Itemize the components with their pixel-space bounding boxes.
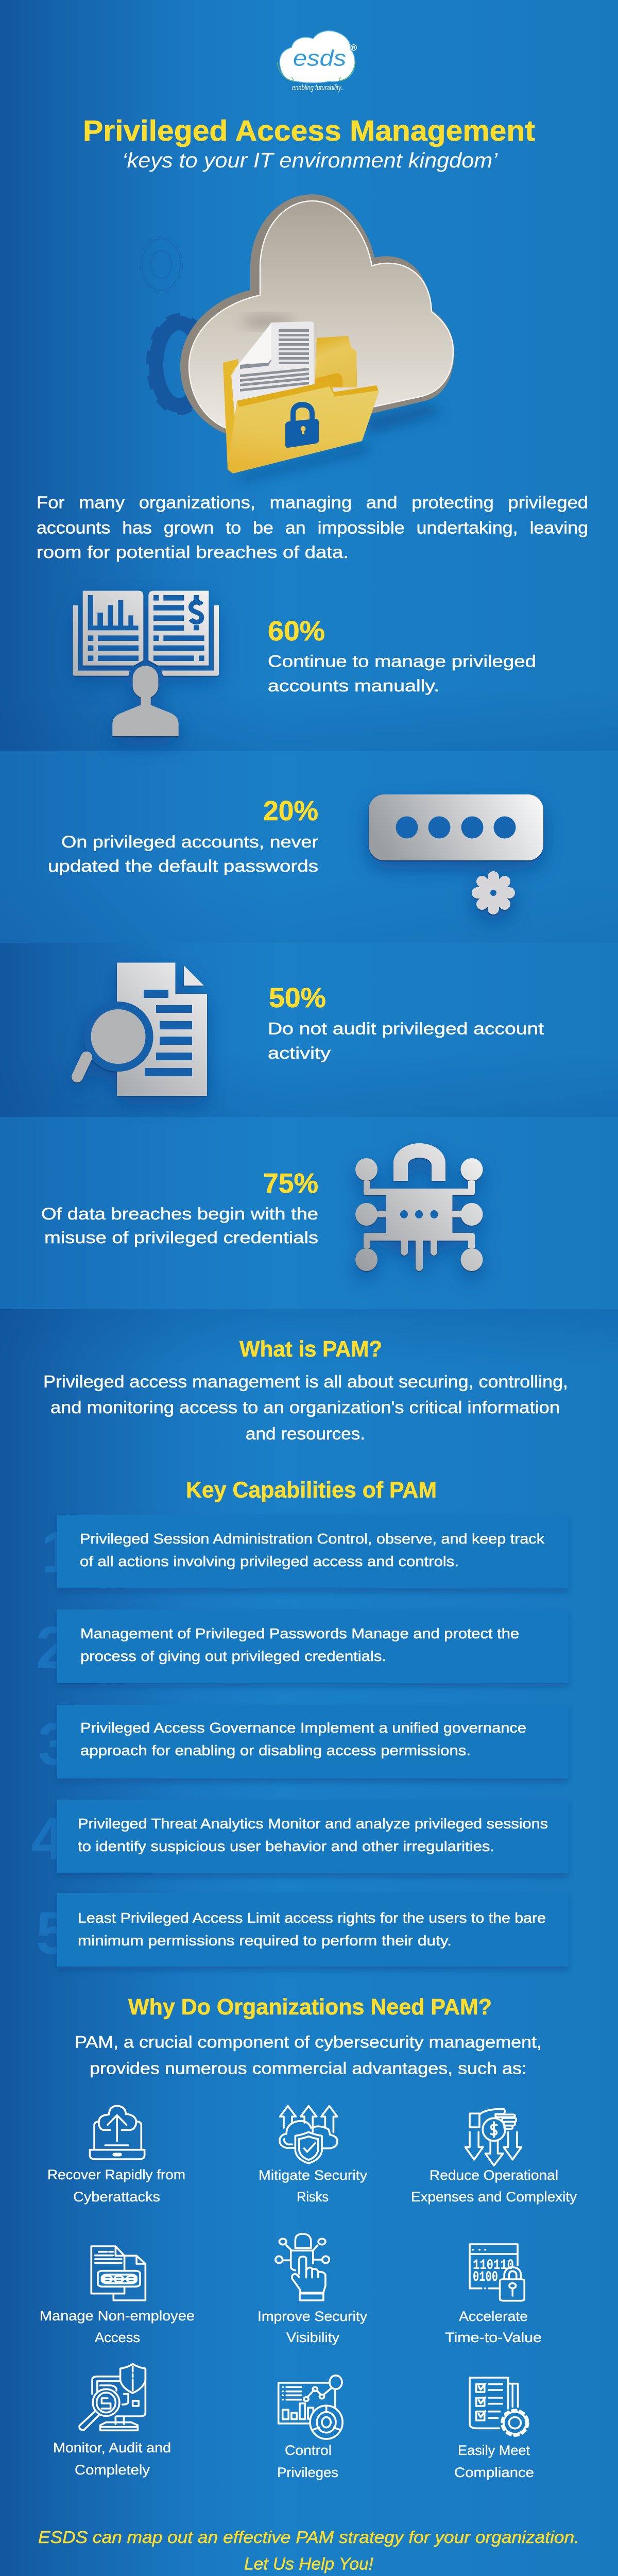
description line 2: updated the default passwords (48, 857, 318, 875)
intro paragraph (37, 493, 588, 562)
logo tagline: enabling futurability.. (292, 84, 344, 92)
line 3: room for potential breaches of data. (37, 543, 349, 562)
magnifier lens (91, 1009, 146, 1064)
description line 1: Of data breaches begin with the (41, 1205, 318, 1223)
line 2: accounts has grown to be an impossible undertaking, leaving (37, 518, 588, 537)
label: cyberattacks: Cyberattacks (73, 2189, 160, 2205)
folded corner (184, 965, 204, 986)
card 1 (57, 1515, 569, 1588)
description line 1: Do not audit privileged account (268, 1019, 544, 1038)
label: privileges: Privileges (277, 2465, 338, 2480)
value: 75% (263, 1168, 318, 1199)
number 2: 2 (36, 1614, 70, 1681)
logo: esds (277, 31, 356, 92)
paper fold (231, 323, 271, 374)
call to action line 2: Let Us Help You! (244, 2554, 373, 2573)
hero illustration: cloud with locked folder (140, 194, 454, 482)
stat: 20% (48, 795, 318, 875)
shackle (393, 1143, 445, 1181)
heading: What is PAM? (239, 1336, 382, 1362)
benefit labels row 2 (40, 2308, 542, 2345)
benefit labels row 3 (53, 2440, 534, 2480)
paragraph line 1: Privileged access management is all about securing, controlling, (43, 1372, 568, 1391)
label: visibility: Visibility (286, 2330, 340, 2345)
icon: fingerprint touch nodes (276, 2234, 329, 2300)
card 2 (57, 1609, 569, 1683)
solid gear (149, 316, 209, 412)
text bars (144, 990, 192, 1076)
icon: password field with gear (369, 794, 543, 909)
label: mitigate: Mitigate Security (259, 2167, 368, 2183)
icon: control dashboard (279, 2376, 342, 2439)
folder shadow (237, 443, 371, 482)
label: expenses: Expenses and Complexity (411, 2189, 577, 2205)
password box (369, 794, 543, 860)
gear flower (477, 877, 509, 909)
icon: laptop cloud upload (90, 2106, 145, 2159)
terminal pads (355, 1158, 483, 1271)
card 4 line 1: Privileged Threat Analytics Monitor and analyze privileged sessions (78, 1816, 548, 1832)
card 5 line 1: Least Privileged Access Limit access rights for the users to the bare (78, 1910, 546, 1926)
card 4 (57, 1800, 569, 1873)
label: accelerate: Accelerate (459, 2309, 528, 2324)
number 1: 1 (41, 1518, 75, 1585)
label: compliance: Compliance (454, 2465, 534, 2480)
capability 2 (36, 1609, 569, 1683)
circuit body (364, 1181, 475, 1271)
heading: Why Do Organizations Need PAM? (128, 1994, 492, 2020)
magnifier ring gap (83, 1002, 153, 1072)
card 3 (57, 1705, 569, 1778)
paper text lines (240, 329, 309, 392)
number 5: 5 (36, 1900, 70, 1967)
label: completely: Completely (75, 2462, 150, 2478)
card 1 line 1: Privileged Session Administration Control, observe, and keep track (80, 1531, 545, 1547)
description line 2: activity (268, 1044, 331, 1062)
front folder (228, 381, 379, 473)
line 1: For many organizations, managing and protecting privileged (37, 493, 588, 512)
description line 2: misuse of privileged credentials (44, 1228, 318, 1247)
label: reduce: Reduce Operational (430, 2167, 558, 2183)
description line 1: On privileged accounts, never (61, 833, 318, 851)
icon: binary window with lock (470, 2244, 524, 2301)
card 5 line 2: minimum permissions required to perform their duty. (78, 1933, 452, 1948)
intro line 2: provides numerous commercial advantages, such as: (90, 2059, 527, 2077)
card 3 line 1: Privileged Access Governance Implement a unified governance (80, 1720, 526, 1736)
value: 50% (269, 982, 326, 1013)
capability 1 (41, 1515, 569, 1588)
label: control: Control (285, 2443, 332, 2458)
icon: documents with chain (91, 2246, 145, 2300)
icon: circuit padlock (355, 1143, 483, 1271)
icon: shield cloud arrows (280, 2106, 337, 2163)
outline gear (140, 236, 182, 293)
password dots (396, 816, 516, 839)
subtitle: ‘keys to your IT environment kingdom’ (122, 148, 498, 172)
number 3: 3 (38, 1710, 72, 1777)
shadow on cloud (242, 317, 294, 327)
magnifier handle (77, 1057, 87, 1077)
cloud face (189, 201, 453, 430)
icon: monitor shield magnifier (79, 2364, 145, 2430)
stat: 50% (268, 982, 544, 1062)
back folder sheet (315, 336, 357, 387)
binary line 1: 110110 (473, 2258, 514, 2274)
label: access: Access (95, 2330, 140, 2345)
description line 2: accounts manually. (268, 676, 439, 695)
capability 4 (31, 1800, 569, 1873)
call to action line 1: ESDS can map out an effective PAM strategy for your organization. (38, 2528, 579, 2547)
heading: key capabilities: Key Capabilities of PAM (186, 1478, 437, 1502)
call to action (38, 2528, 579, 2573)
stat: 60% (268, 616, 536, 695)
capability 5 (36, 1893, 569, 1967)
paragraph line 2: and monitoring access to an organization's critical information (50, 1398, 560, 1417)
registered mark (351, 45, 356, 50)
card 2 line 2: process of giving out privileged credentials. (80, 1648, 386, 1664)
stat: 75% (41, 1168, 318, 1247)
card 2 line 1: Management of Privileged Passwords Manage and protect the (80, 1625, 519, 1641)
keyhole (301, 426, 306, 434)
section: why PAM (75, 1994, 542, 2077)
label: time to value: Time-to-Value (445, 2330, 542, 2345)
value: 20% (263, 795, 318, 826)
paper document (231, 321, 314, 417)
card 4 line 2: to identify suspicious user behavior and other irregularities. (78, 1838, 494, 1854)
label: easily meet: Easily Meet (458, 2443, 530, 2458)
label: improve: Improve Security (258, 2309, 368, 2324)
capability 3 (38, 1705, 569, 1778)
card 3 line 2: approach for enabling or disabling access permissions. (80, 1742, 471, 1758)
intro line 1: PAM, a crucial component of cybersecurity management, (75, 2033, 542, 2052)
icon: money hand down arrows (465, 2109, 521, 2165)
label: risks: Risks (297, 2189, 329, 2205)
value: 60% (268, 616, 325, 647)
section: what is PAM (43, 1336, 568, 1443)
icon: compliance checklist gear (470, 2378, 528, 2435)
paragraph line 3: and resources. (246, 1424, 365, 1443)
icon: document with magnifier (77, 962, 207, 1096)
title: Privileged Access Management (83, 114, 535, 147)
number 4: 4 (31, 1805, 65, 1872)
label: recover: Recover Rapidly from (47, 2167, 185, 2182)
cloud rim (180, 194, 454, 433)
logo wordmark: esds (293, 45, 346, 71)
label: monitor: Monitor, Audit and (53, 2440, 171, 2455)
cloud shadow (360, 404, 443, 433)
registered mark: R (352, 45, 355, 50)
padlock (285, 402, 319, 448)
left folder flap (223, 359, 247, 469)
chip dots (400, 1210, 438, 1218)
document sheet (117, 962, 207, 1096)
icon: book and person (73, 591, 219, 736)
description line 1: Continue to manage privileged (268, 652, 536, 671)
card 5 (57, 1893, 569, 1967)
benefit labels row 1 (47, 2167, 577, 2205)
card 1 line 2: of all actions involving privileged access and controls. (80, 1553, 459, 1569)
binary line 2: 0100 (473, 2269, 498, 2285)
label: manage: Manage Non-employee (40, 2308, 195, 2324)
